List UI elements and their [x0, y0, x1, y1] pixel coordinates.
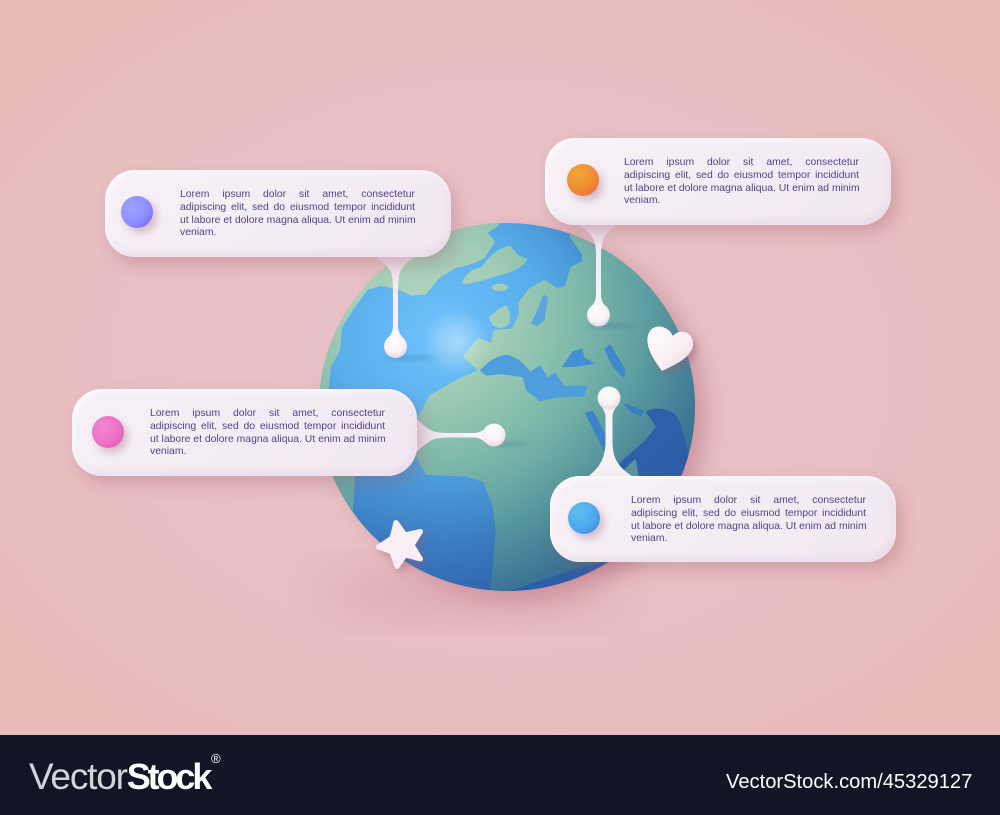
text block: Lorem ipsum dolor sit amet, consectetur [150, 408, 385, 419]
text block: adipiscing elit, sed do eiusmod tempor incididunt [624, 170, 859, 181]
text block [150, 408, 386, 457]
text block: ut labore et dolore magna aliqua. Ut enim ad minim [150, 434, 386, 445]
text block: adipiscing elit, sed do eiusmod tempor incididunt [150, 421, 385, 432]
icon: orange dot [567, 164, 599, 196]
panel: callout top right [545, 138, 891, 225]
text block [180, 189, 416, 238]
text block: adipiscing elit, sed do eiusmod tempor incididunt [180, 202, 415, 213]
text block: veniam. [180, 227, 216, 238]
icon: pink dot [92, 416, 124, 448]
panel: callout top left [105, 170, 451, 257]
text block: veniam. [150, 446, 186, 457]
globe highlight [428, 312, 486, 372]
footer band [0, 735, 1000, 815]
text block: ut labore et dolore magna aliqua. Ut enim ad minim [180, 215, 416, 226]
text block: ut labore et dolore magna aliqua. Ut enim ad minim [631, 521, 867, 532]
illustration: background and globe [202, 149, 798, 620]
continents [320, 223, 695, 591]
panel: callout bottom right [550, 476, 896, 562]
text block: Lorem ipsum dolor sit amet, consectetur [180, 189, 415, 200]
logo: VectorStock [29, 756, 209, 797]
icon: blue dot [568, 502, 600, 534]
footer band: ® [211, 751, 221, 766]
connector 2 [574, 222, 622, 326]
panel: callout middle left [72, 389, 417, 476]
text block: ut labore et dolore magna aliqua. Ut enim ad minim [624, 183, 860, 194]
connector shadows [384, 324, 638, 446]
connector 1 [370, 254, 420, 358]
icon: heart [647, 326, 697, 376]
globe shading [319, 223, 695, 591]
text block: Lorem ipsum dolor sit amet, consectetur [631, 495, 866, 506]
seas [481, 295, 697, 597]
text block: veniam. [631, 533, 667, 544]
globe shadow [320, 234, 706, 614]
text block: veniam. [624, 195, 660, 206]
icon: purple dot [121, 196, 153, 228]
text block: adipiscing elit, sed do eiusmod tempor incididunt [631, 508, 866, 519]
connector 3 [414, 416, 506, 455]
image id: VectorStock.com/45329127 [726, 771, 972, 793]
text block [631, 495, 867, 544]
text block: Lorem ipsum dolor sit amet, consectetur [624, 157, 859, 168]
text block [624, 157, 860, 206]
connector 4 [584, 386, 637, 479]
icon: star [378, 522, 424, 570]
globe [320, 223, 695, 591]
